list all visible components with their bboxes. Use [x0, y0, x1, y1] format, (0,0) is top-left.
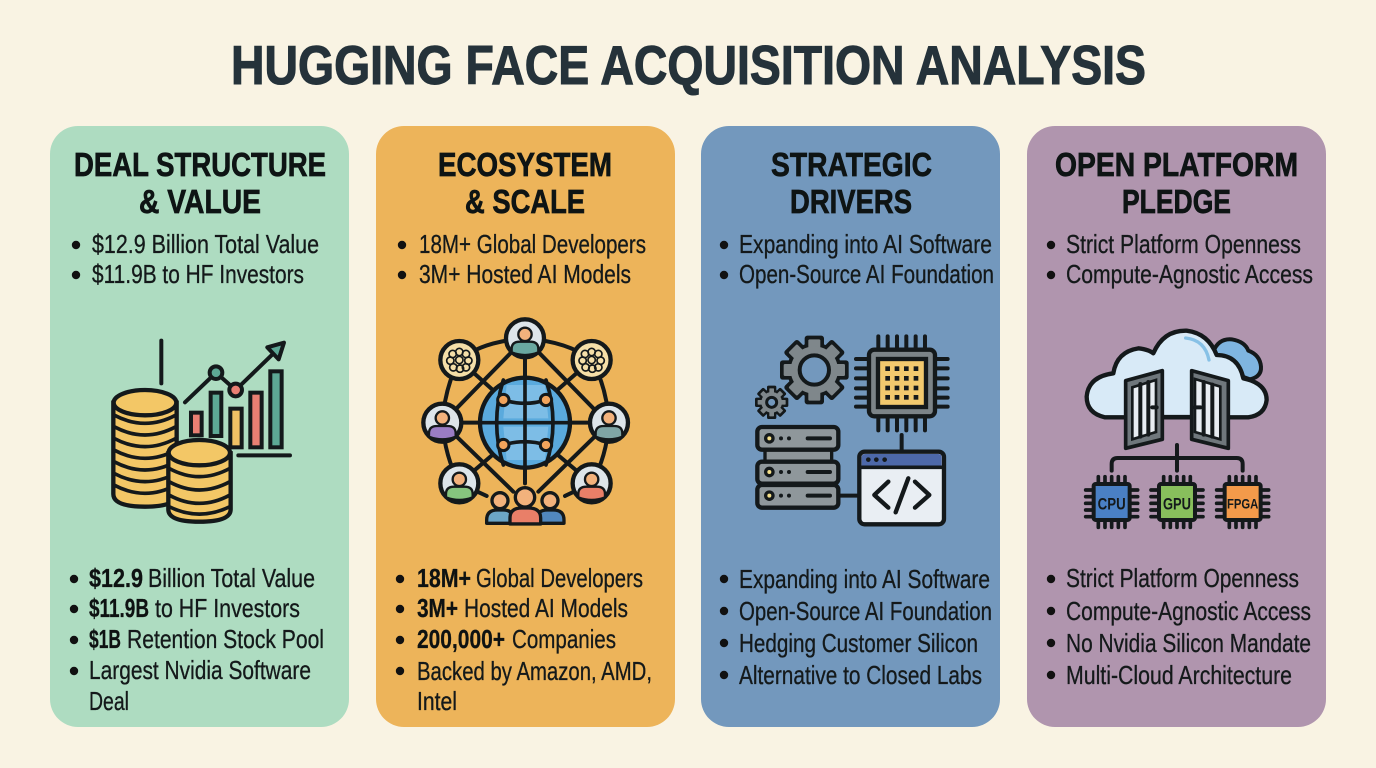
bottom bullet list: deal: Largest Nvidia Software	[89, 655, 311, 685]
top bullet list: deal	[72, 229, 319, 289]
heading: deal structure	[74, 146, 326, 220]
bottom bullet list: pledge: No Nvidia Silicon Mandate	[1066, 628, 1311, 658]
heading: open platform pledge: PLEDGE	[1122, 183, 1231, 220]
top bullet list: deal: $11.9B to HF Investors	[92, 259, 304, 289]
icon: cloud with open doors and compute chips: CPU	[1098, 494, 1126, 513]
panel: ecosystem and scale	[376, 126, 675, 727]
heading: strategic drivers: DRIVERS	[790, 183, 912, 220]
bottom bullet list: drivers: Expanding into AI Software	[739, 564, 990, 594]
bottom bullet list: deal: to HF Investors	[155, 593, 300, 623]
heading: open platform pledge: OPEN PLATFORM	[1055, 146, 1298, 183]
heading: ecosystem: & SCALE	[465, 183, 585, 220]
bottom bullet list: pledge: Strict Platform Openness	[1066, 563, 1299, 593]
heading: ecosystem: ECOSYSTEM	[438, 146, 612, 183]
bottom bullet list: deal: Billion Total Value	[148, 563, 315, 593]
bottom bullet list: pledge	[1047, 563, 1311, 690]
top bullet list: deal: $12.9 Billion Total Value	[92, 229, 319, 259]
bottom bullet list: ecosystem: Companies	[512, 624, 616, 654]
bottom bullet list: drivers: Alternative to Closed Labs	[739, 660, 982, 690]
top bullet list: pledge: Compute-Agnostic Access	[1066, 259, 1313, 289]
bottom bullet list: drivers: Hedging Customer Silicon	[739, 628, 978, 658]
bottom bullet list: ecosystem: Backed by Amazon, AMD,	[417, 656, 652, 686]
heading: deal structure: DEAL STRUCTURE	[74, 146, 326, 183]
bottom bullet list: ecosystem: 3M+	[417, 593, 458, 623]
bottom bullet list: pledge: Compute-Agnostic Access	[1066, 596, 1311, 626]
bottom bullet list: ecosystem: Hosted AI Models	[464, 593, 628, 623]
bottom bullet list: deal: $1B	[89, 624, 121, 654]
icon: cloud with open doors and compute chips: GPU	[1163, 494, 1191, 513]
bottom bullet list: drivers	[720, 564, 992, 690]
top bullet list: drivers	[720, 229, 994, 289]
icon: gears, chip, servers and code window	[755, 336, 948, 524]
panel: deal structure and value	[50, 126, 349, 727]
bottom bullet list: ecosystem: 200,000+	[417, 624, 505, 654]
bottom bullet list: drivers: Open-Source AI Foundation	[739, 596, 992, 626]
heading: ecosystem	[438, 146, 612, 220]
bottom bullet list: deal	[70, 563, 324, 716]
heading: deal structure: & VALUE	[139, 183, 261, 220]
heading: strategic drivers: STRATEGIC	[771, 146, 932, 183]
icon: coins and growth chart	[113, 341, 290, 522]
top bullet list: drivers: Expanding into AI Software	[739, 229, 992, 259]
icon: cloud with open doors and compute chips	[1086, 331, 1269, 527]
panel: open platform pledge	[1027, 126, 1326, 727]
top bullet list: pledge	[1047, 229, 1313, 289]
icon: cloud with open doors and compute chips: FPGA	[1227, 495, 1258, 511]
bottom bullet list: deal: $12.9	[89, 563, 143, 593]
heading: open platform pledge	[1055, 146, 1298, 220]
bottom bullet list: deal: Retention Stock Pool	[127, 624, 324, 654]
bottom bullet list: deal: $11.9B	[89, 593, 149, 623]
title: HUGGING FACE ACQUISITION ANALYSIS	[231, 34, 1146, 96]
top bullet list: drivers: Open-Source AI Foundation	[739, 259, 994, 289]
top bullet list: ecosystem: 3M+ Hosted AI Models	[419, 259, 631, 289]
top bullet list: ecosystem: 18M+ Global Developers	[419, 229, 646, 259]
bottom bullet list: pledge: Multi-Cloud Architecture	[1066, 660, 1292, 690]
top bullet list: pledge: Strict Platform Openness	[1066, 229, 1301, 259]
bottom bullet list: ecosystem: Intel	[417, 686, 457, 716]
top bullet list: ecosystem	[398, 229, 646, 289]
bottom bullet list: deal: Deal	[89, 686, 129, 716]
icon: global network of people and models	[423, 319, 628, 524]
bottom bullet list: ecosystem: Global Developers	[476, 563, 643, 593]
panel: strategic drivers	[701, 126, 1000, 727]
heading: strategic drivers	[771, 146, 932, 220]
bottom bullet list: ecosystem	[396, 563, 652, 716]
bottom bullet list: ecosystem: 18M+	[417, 563, 471, 593]
